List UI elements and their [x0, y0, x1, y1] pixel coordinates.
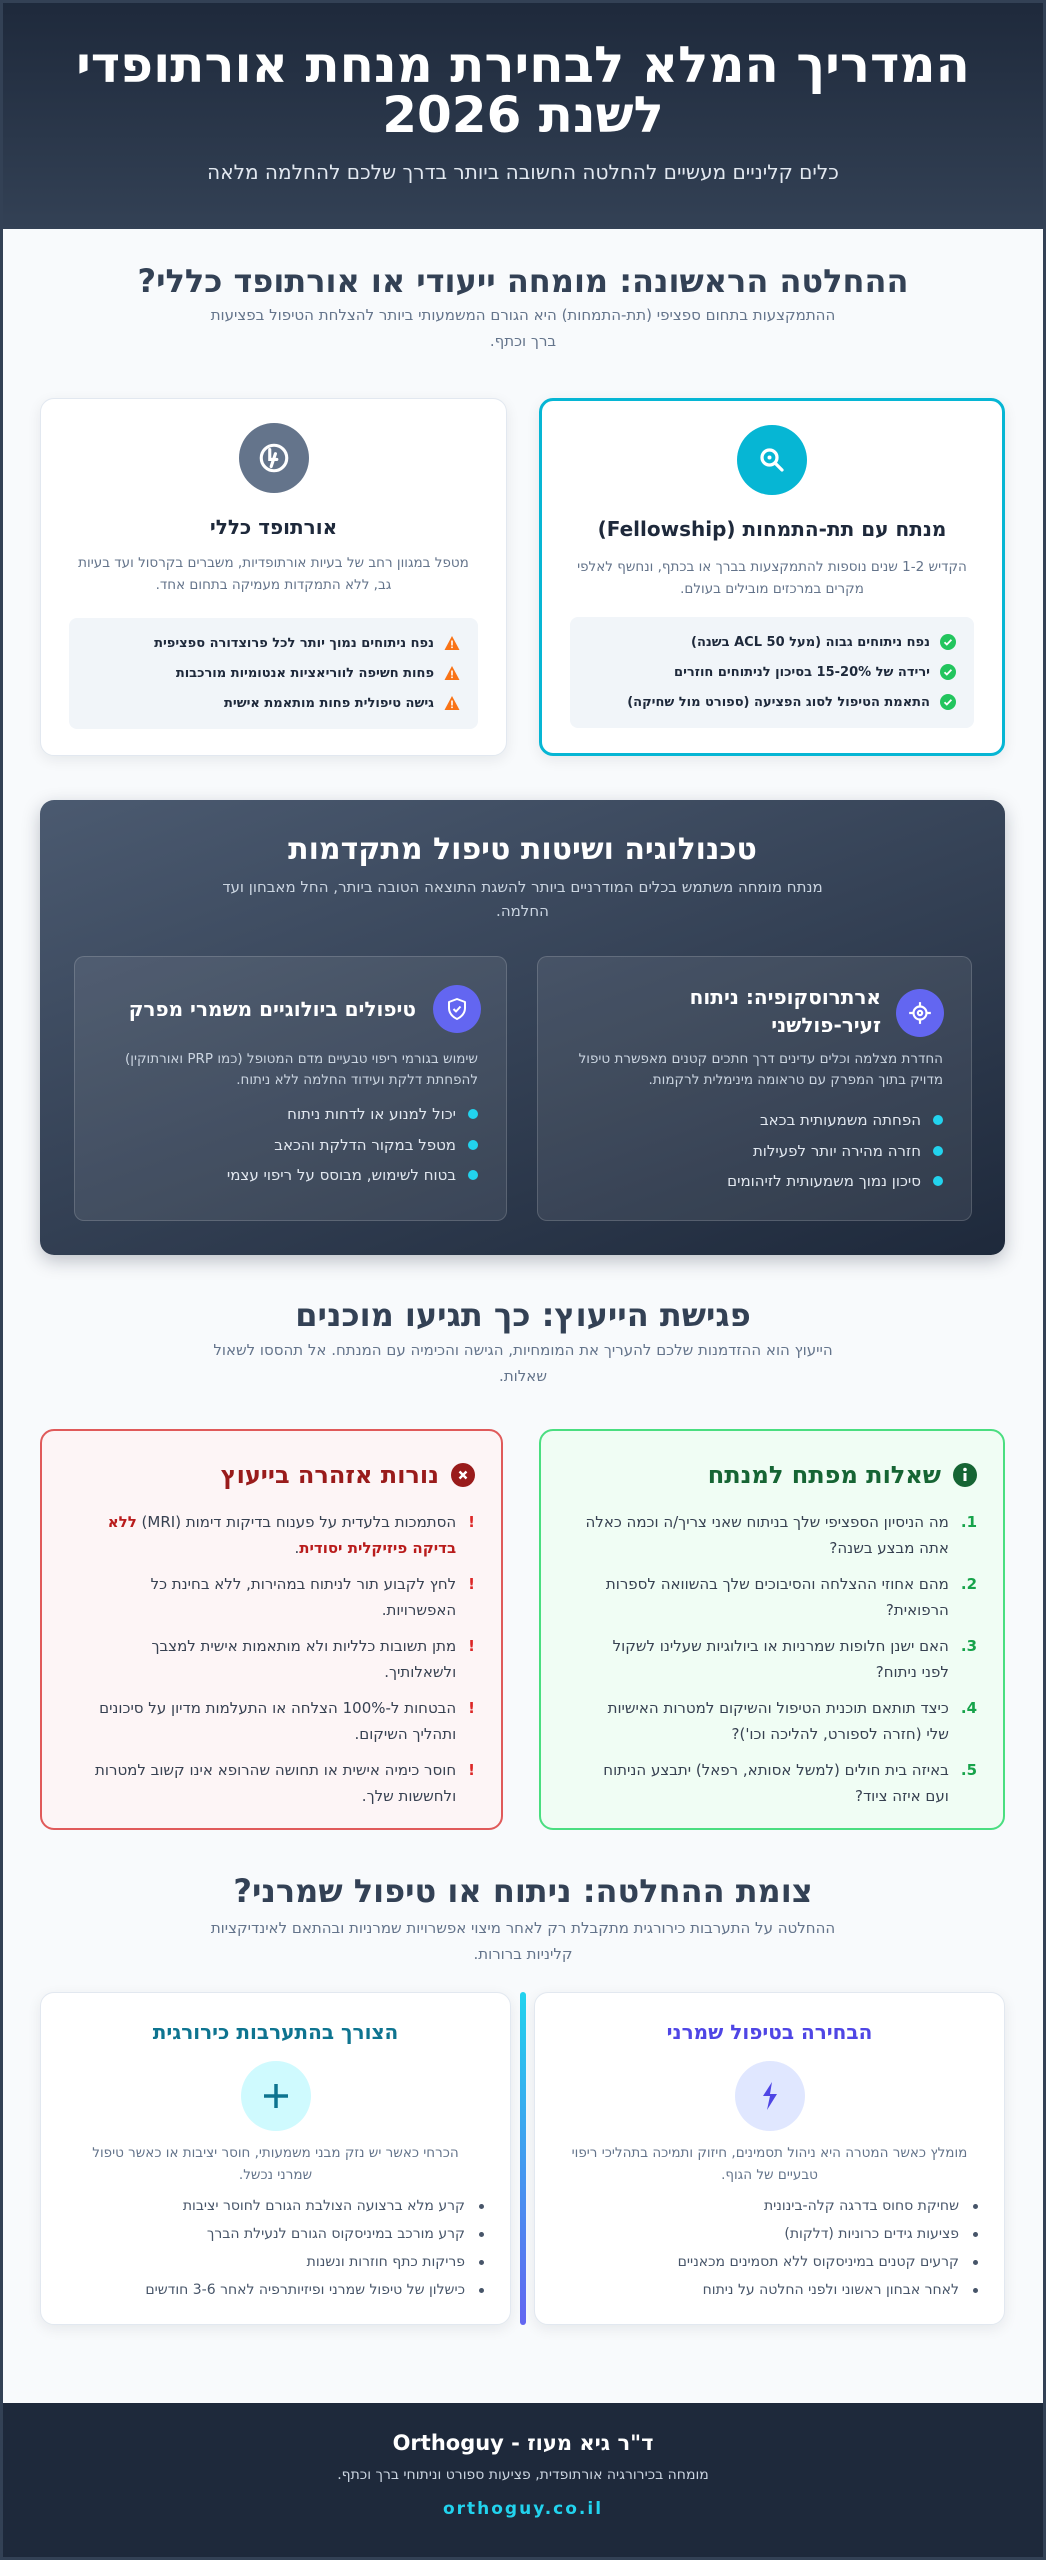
- section 1 heading: ההחלטה הראשונה: מומחה ייעודי או אורתופד כללי?: [138, 262, 908, 300]
- warnings list: [95, 1513, 475, 1805]
- divider bar: [520, 1992, 526, 2325]
- section 4 heading: צומת ההחלטה: ניתוח או טיפול שמרני?: [233, 1872, 813, 1910]
- card: conservative treatment: [534, 1992, 1005, 2325]
- heading: טיפולים ביולוגיים משמרי מפרק: [129, 997, 416, 1021]
- title: המדריך המלא לבחירת מנחת אורתופדי: [76, 36, 970, 94]
- bullets: סיכון נמוך משמעותית לזיהומים: [727, 1172, 921, 1190]
- section 3 subtitle: [213, 1341, 833, 1385]
- warnings list: לחץ לקבוע תור לניתוח במהירות, ללא בחינת כל: [151, 1575, 456, 1593]
- section 1 subtitle: ברך וכתף.: [490, 332, 556, 350]
- description: [579, 1051, 943, 1088]
- card: general orthopedist: [40, 398, 507, 756]
- footer name: ד"ר גיא מעוז - Orthoguy: [393, 2431, 653, 2455]
- card: biologics: [74, 956, 507, 1221]
- panel: key questions: [539, 1429, 1005, 1830]
- drawbacks list: נפח ניתוחים נמוך יותר לכל פרוצדורה ספציפית: [154, 636, 434, 650]
- description: טבעיים של הגוף.: [721, 2167, 818, 2183]
- section 4 subtitle: קליניות ברורות.: [473, 1945, 572, 1963]
- bullets: [727, 1111, 943, 1190]
- benefits list: התאמת הטיפול לסוג הפציעה (ספורט מול שחיקה): [627, 694, 930, 710]
- questions list: מהם אחוזי ההצלחה והסיבוכים שלך בהשוואה לספרות: [606, 1575, 949, 1593]
- benefits list: [570, 617, 974, 728]
- warnings list: !: [468, 1699, 475, 1717]
- questions list: הרפואית?: [886, 1601, 949, 1619]
- bullets: כישלון של טיפול שמרני ופיזיותרפיה לאחר 3-6 חודשים: [145, 2282, 465, 2298]
- header: [0, 0, 1046, 229]
- questions list: לפני ניתוח?: [876, 1663, 949, 1681]
- benefits list: ירידה של 15-20% בסיכון לניתוחים חוזרים: [674, 664, 930, 680]
- section 1 subtitle: ההתמקצעות בתחום ספציפי (תת-התמחות) היא הגורם המשמעותי ביותר להצלחת הטיפול בפציעות: [211, 306, 835, 324]
- icon: shield: [433, 985, 481, 1033]
- warnings list: הבטחות ל-100% הצלחה או התעלמות מדיון על סיכונים: [99, 1699, 456, 1717]
- section 3 subtitle: שאלות.: [499, 1367, 547, 1385]
- card title: אורתופד כללי: [210, 515, 337, 539]
- questions list: האם ישנן חלופות שמרניות או ביולוגיות שעלינו לשקול: [613, 1637, 949, 1655]
- warnings list: !: [468, 1637, 475, 1655]
- drawbacks list: פחות חשיפה לווריאציות אנטומיות מורכבות: [176, 666, 434, 680]
- warnings list: מתן תשובות כלליות ולא מותאמות אישית למצבך: [151, 1637, 456, 1655]
- card description: מטפל במגוון רחב של בעיות אורתופדיות, משברים בקרסול ועד בעיות: [78, 555, 469, 571]
- warnings list: !: [468, 1575, 475, 1593]
- questions list: אתה מבצע בשנה?: [829, 1539, 949, 1557]
- description: החדרת מצלמה וכלים עדינים דרך חתכים קטנים מאפשרת טיפול: [579, 1051, 943, 1067]
- card title: הבחירה בטיפול שמרני: [667, 2020, 872, 2044]
- section 4 subtitle: [211, 1919, 835, 1963]
- bullets: פציעות גידים כרוניות (דלקות): [784, 2226, 959, 2242]
- questions list: ועם איזה ציוד?: [855, 1787, 949, 1805]
- card: arthroscopy: [537, 956, 972, 1221]
- description: מדויק בתוך המפרק עם טראומה מינימלית לרקמות.: [648, 1072, 943, 1088]
- panel: technology: [40, 800, 1005, 1255]
- card description: מקרים במרכזים מובילים בעולם.: [680, 581, 864, 597]
- description: להפחתת דלקת ועידוד החלמה ללא ניתוח.: [236, 1072, 478, 1088]
- questions list: שלי (חזרה לספורט, להליכה וכו')?: [732, 1725, 949, 1743]
- warnings list: האפשרויות.: [382, 1601, 456, 1619]
- card description: [577, 559, 967, 597]
- footer link: orthoguy.co.il: [443, 2499, 603, 2519]
- drawbacks list: גישה טיפולית פחות מותאמת אישית: [224, 696, 434, 710]
- warnings list: הסתמכות בלעדית על פענוח בדיקות דימות (MRI) ללא: [108, 1513, 456, 1531]
- heading: ארתרוסקופיה: ניתוח זעיר-פולשני: [690, 985, 881, 1037]
- card title: מנתח עם תת-התמחות (Fellowship): [598, 517, 946, 541]
- warnings list: בדיקה פיזיקלית יסודית.: [294, 1539, 456, 1557]
- icon: target: [896, 989, 944, 1037]
- description: הכרחי כאשר יש נזק מבני משמעותי, חוסר יציבות או כאשר טיפול: [92, 2145, 459, 2161]
- icon: bolt: [735, 2061, 805, 2131]
- panel subtitle: החלמה.: [496, 902, 549, 920]
- bullets: לאחר אבחון ראשוני ולפני החלטה על ניתוח: [703, 2282, 959, 2298]
- bullets: [227, 1105, 478, 1184]
- bullets: יכול למנוע או לדחות ניתוח: [287, 1105, 456, 1123]
- section 3 subtitle: הייעוץ הוא ההזדמנות שלכם להעריך את המומחיות, הגישה והכימיה עם המנתח. אל תהססו לשאול: [213, 1341, 833, 1359]
- footer tagline: מומחה בכירורגיה אורתופדית, פציעות ספורט וניתוחי ברך וכתף.: [337, 2467, 709, 2483]
- panel subtitle: מנתח מומחה משתמש בכלים המודרניים ביותר להשגת התוצאה הטובה ביותר, החל מאבחון ועד: [222, 878, 823, 896]
- drawbacks list: [69, 618, 478, 729]
- card: fellowship specialist: [539, 398, 1005, 756]
- section 4 subtitle: ההחלטה על התערבות כירורגית מתקבלת רק לאחר מיצוי אפשרויות שמרניות ובהתאם לאינדיקציות: [211, 1919, 835, 1937]
- panel: red flags: [40, 1429, 503, 1830]
- warnings list: ולחששות שלך.: [362, 1787, 456, 1805]
- warnings list: חוסר כימיה אישית או תחושה שהרופא אינו קשוב למטרות: [95, 1761, 456, 1779]
- card description: הקדיש 1-2 שנים נוספות להתמקצעות בברך או בכתף, ונחשף לאלפי: [577, 559, 967, 575]
- bullets: קרעים קטנים במיניסקוס ללא תסמינים מכאניים: [678, 2254, 959, 2270]
- questions list: 2.: [961, 1575, 977, 1593]
- bullets: שחיקת סחוס בדרגה קלה-בינונית: [764, 2198, 959, 2214]
- warnings list: !: [468, 1513, 475, 1531]
- subtitle: כלים קליניים מעשיים להחלטה החשובה ביותר בדרך שלכם להחלמה מלאה: [207, 160, 839, 184]
- panel subtitle: [222, 878, 823, 920]
- bullets: מטפל במקור הדלקת והכאב: [274, 1136, 456, 1154]
- panel title: טכנולוגיה ושיטות טיפול מתקדמות: [288, 832, 757, 867]
- questions list: מה הניסיון הספציפי שלך בניתוח שאני צריך/ה וכמה כאלה: [586, 1513, 949, 1531]
- warnings list: !: [468, 1761, 475, 1779]
- title: לשנת 2026: [382, 86, 664, 144]
- description: שימוש בגורמי ריפוי טבעיים מדם המטופל (כמו PRP ואורתוקין): [125, 1051, 478, 1067]
- questions list: [586, 1513, 977, 1805]
- heading with info icon: שאלות מפתח למנתח: [708, 1461, 941, 1489]
- bullets: חזרה מהירה יותר לפעילות: [753, 1142, 921, 1160]
- bullets: פריקות כתף חוזרות ונשנות: [307, 2254, 465, 2270]
- warnings list: ולשאלותיך.: [384, 1663, 456, 1681]
- questions list: 5.: [961, 1761, 977, 1779]
- card description: [78, 555, 469, 593]
- bullets: [678, 2198, 978, 2298]
- bullets: קרע מורכב במיניסקוס הגורם לנעילת הברך: [207, 2226, 465, 2242]
- card description: גב, ללא התמקדות מעמיקה בתחום אחד.: [156, 577, 391, 593]
- description: [125, 1051, 478, 1088]
- description: [572, 2145, 967, 2183]
- card title: הצורך בהתערבות כירורגית: [153, 2020, 398, 2044]
- section 3 heading: פגישת הייעוץ: כך תגיעו מוכנים: [295, 1296, 751, 1334]
- footer: [0, 2403, 1046, 2560]
- icon: plus: [241, 2061, 311, 2131]
- card: surgical intervention: [40, 1992, 511, 2325]
- benefits list: נפח ניתוחים גבוה (מעל ACL 50 בשנה): [691, 634, 930, 650]
- icon: general: [239, 423, 309, 493]
- icon: search: [737, 425, 807, 495]
- bullets: [145, 2198, 484, 2298]
- questions list: באיזה בית חולים (למשל אסותא, רפאל) יתבצע הניתוח: [603, 1761, 949, 1779]
- questions list: 1.: [961, 1513, 977, 1531]
- description: שמרני נכשל.: [239, 2167, 312, 2183]
- bullets: בטוח לשימוש, מבוסס על ריפוי עצמי: [227, 1166, 456, 1184]
- description: מומלץ כאשר המטרה היא ניהול תסמינים, חיזוק ותמיכה בתהליכי ריפוי: [572, 2145, 967, 2161]
- bullets: הפחתה משמעותית בכאב: [760, 1111, 921, 1129]
- warnings list: ותהליך השיקום.: [354, 1725, 456, 1743]
- questions list: 3.: [961, 1637, 977, 1655]
- questions list: כיצד תותאם תוכנית הטיפול והשיקום למטרות האישיות: [608, 1699, 949, 1717]
- bullets: קרע מלא ברצועה הצולבת הגורם לחוסר יציבות: [183, 2198, 465, 2214]
- heading with x icon: נורות אזהרה בייעוץ: [221, 1461, 439, 1489]
- questions list: 4.: [961, 1699, 977, 1717]
- title: [76, 36, 970, 144]
- section 1 subtitle: [210, 306, 835, 350]
- description: [92, 2145, 459, 2183]
